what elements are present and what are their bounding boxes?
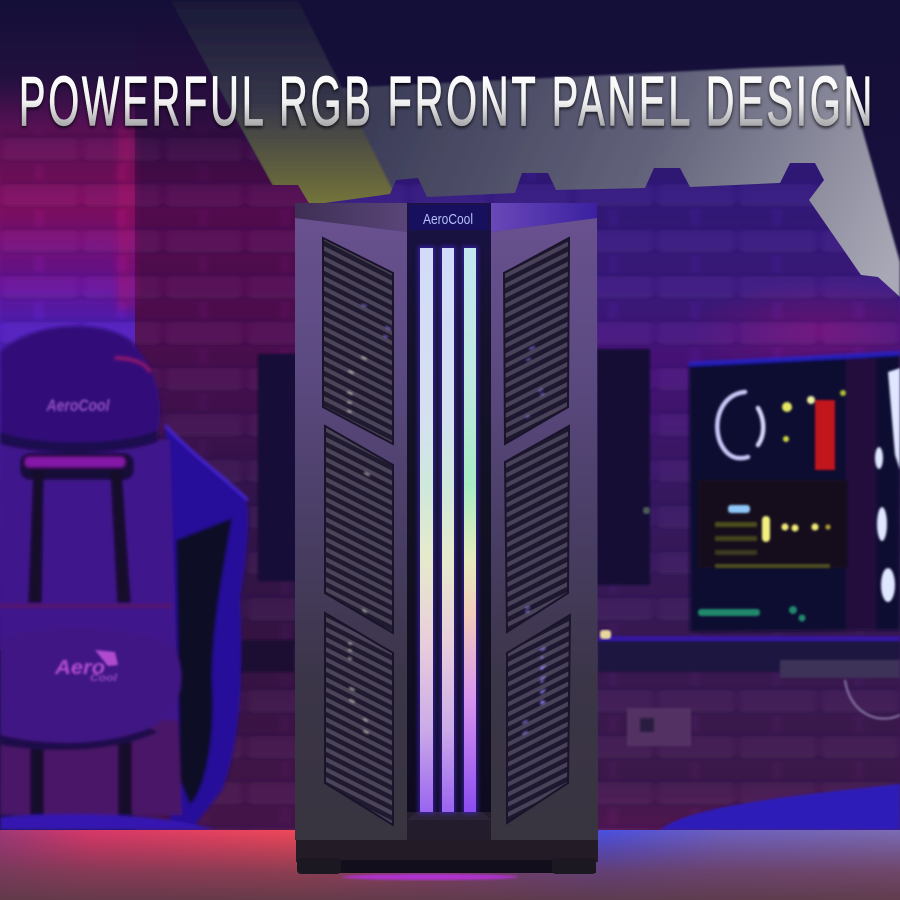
blue cushion: [660, 784, 900, 830]
vent light sparkles: [348, 305, 545, 734]
ceiling: [0, 0, 900, 340]
side fan lights: [875, 368, 900, 602]
cable: [845, 680, 900, 719]
right front panel: [491, 203, 598, 840]
gaming chair: [0, 326, 248, 830]
chair straps: [28, 470, 131, 603]
green front lights: [698, 606, 806, 622]
seat front: [0, 814, 215, 830]
left vent middle: [325, 426, 393, 633]
fan ring: [717, 392, 763, 458]
monitor left part: [258, 354, 300, 581]
ceiling light panel: yellow: [170, 0, 400, 205]
table surface: [0, 830, 900, 900]
right vent top: [504, 238, 569, 444]
chair headrest: [0, 326, 160, 450]
chair logo: lumbar: Cool: [90, 673, 117, 684]
case foot left: [297, 858, 341, 874]
chair logo: lumbar: Aero: [54, 657, 105, 679]
yellow light spot: [600, 630, 611, 639]
motherboard lights: [715, 390, 846, 568]
chair logo: headrest: AeroCool: [46, 396, 111, 415]
left vent top: [323, 238, 393, 444]
background PC tower: [643, 351, 900, 632]
logo plate: [409, 205, 488, 230]
case foot right: [552, 858, 596, 874]
right vent middle: [505, 426, 569, 632]
centre column: [407, 203, 491, 840]
desk: [235, 636, 900, 678]
AeroCool logo: AeroCool: [423, 211, 473, 228]
tower body: [689, 351, 900, 632]
LED glow: [418, 246, 478, 814]
LED bar left: [420, 248, 433, 812]
lumbar cushion: [0, 628, 181, 743]
wall outlet: [627, 708, 691, 746]
case base: [296, 838, 598, 880]
chair logo: lumbar: [54, 650, 118, 684]
left vent bottom: [325, 613, 393, 825]
chair wing: [165, 425, 248, 825]
title: POWERFUL RGB FRONT PANEL DESIGN: [19, 63, 872, 141]
main computer case: [295, 203, 598, 880]
LED bar right: [464, 248, 476, 812]
red RAM: [815, 400, 835, 470]
monitor right part: [596, 349, 650, 585]
ceiling light panel: grey: [340, 65, 900, 320]
right vent bottom: [507, 615, 570, 823]
LED bar middle: [442, 248, 454, 812]
headrest strap slot: [20, 453, 134, 480]
left front panel: [295, 203, 407, 840]
chair back: [0, 440, 178, 720]
